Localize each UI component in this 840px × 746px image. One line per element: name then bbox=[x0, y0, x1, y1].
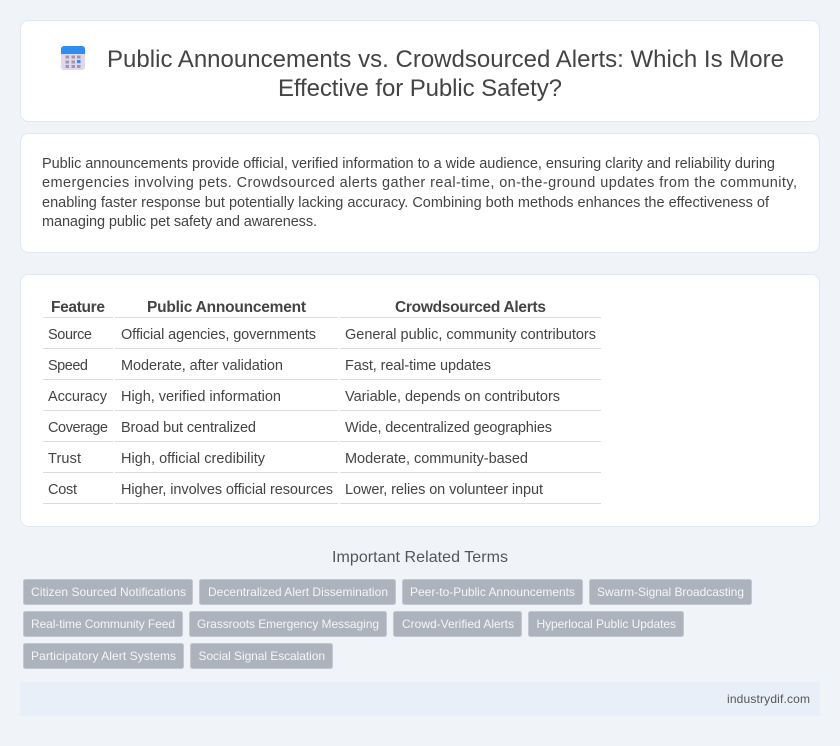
row: cost: Cost bbox=[48, 482, 77, 498]
heading: related terms: Important Related Terms bbox=[332, 549, 508, 566]
tag: Social Signal Escalation bbox=[198, 649, 325, 663]
row: speed: Moderate, after validation bbox=[121, 358, 283, 374]
panel: comparison table bbox=[20, 274, 820, 526]
row: trust: Trust bbox=[48, 451, 81, 467]
intro paragraph: emergencies involving pets. Crowdsourced alerts gather real-time, on-the-ground updates from the community, bbox=[42, 175, 797, 191]
intro paragraph: enabling faster response but potentially lacking accuracy. Combining both methods enhances the effectiveness of bbox=[42, 195, 770, 211]
row: trust: High, official credibility bbox=[121, 451, 266, 467]
tag: Citizen Sourced Notifications bbox=[31, 585, 186, 599]
tag bbox=[200, 580, 396, 604]
footer bbox=[20, 682, 820, 716]
table header bbox=[51, 299, 546, 316]
row: coverage: Broad but centralized bbox=[121, 420, 256, 436]
panel: title header bbox=[20, 20, 820, 122]
icon: calendar bbox=[61, 46, 85, 70]
row: source bbox=[48, 327, 596, 343]
tag bbox=[24, 612, 182, 636]
footer: industrydif.com bbox=[727, 692, 810, 706]
row: accuracy: High, verified information bbox=[121, 389, 281, 405]
table header: Crowdsourced Alerts bbox=[395, 299, 546, 316]
tag: Crowd-Verified Alerts bbox=[402, 617, 514, 631]
tag bbox=[528, 612, 684, 636]
tag bbox=[190, 612, 386, 636]
tag: Peer-to-Public Announcements bbox=[410, 585, 575, 599]
tag: Swarm-Signal Broadcasting bbox=[597, 585, 744, 599]
tag bbox=[190, 644, 332, 668]
tag list bbox=[24, 580, 752, 668]
row: cost: Lower, relies on volunteer input bbox=[345, 482, 543, 498]
intro paragraph bbox=[42, 156, 797, 230]
row: cost bbox=[48, 482, 543, 498]
table header: Feature bbox=[51, 299, 105, 316]
row: accuracy: Variable, depends on contributors bbox=[345, 389, 560, 405]
row: cost: Higher, involves official resources bbox=[121, 482, 333, 498]
tag: Participatory Alert Systems bbox=[31, 649, 176, 663]
row: coverage: Wide, decentralized geographies bbox=[345, 420, 552, 436]
intro paragraph: managing public pet safety and awareness. bbox=[42, 214, 317, 230]
intro paragraph: Public announcements provide official, verified information to a wide audience, ensuring clarity and reliability during bbox=[42, 156, 775, 172]
row: source: Official agencies, governments bbox=[121, 327, 316, 343]
row: trust bbox=[48, 451, 528, 467]
title: Effective for Public Safety? bbox=[278, 75, 562, 102]
title bbox=[107, 46, 784, 102]
row: source: General public, community contributors bbox=[345, 327, 596, 343]
tag bbox=[394, 612, 522, 636]
panel: intro text bbox=[20, 134, 820, 252]
row: speed: Fast, real-time updates bbox=[345, 358, 491, 374]
row: accuracy: Accuracy bbox=[48, 389, 108, 405]
row: accuracy bbox=[48, 389, 560, 405]
row: speed bbox=[48, 358, 491, 374]
tag bbox=[24, 580, 192, 604]
row: coverage: Coverage bbox=[48, 420, 108, 436]
tag: Hyperlocal Public Updates bbox=[536, 617, 676, 631]
tag: Grassroots Emergency Messaging bbox=[197, 617, 379, 631]
tag: Decentralized Alert Dissemination bbox=[208, 585, 388, 599]
table header: Public Announcement bbox=[147, 299, 306, 316]
row: speed: Speed bbox=[48, 358, 88, 374]
tag bbox=[402, 580, 582, 604]
title: Public Announcements vs. Crowdsourced Alerts: Which Is More bbox=[107, 46, 784, 73]
row: source: Source bbox=[48, 327, 92, 343]
tag: Real-time Community Feed bbox=[31, 617, 175, 631]
tag bbox=[590, 580, 752, 604]
row: coverage bbox=[48, 420, 552, 436]
tag bbox=[24, 644, 184, 668]
row: trust: Moderate, community-based bbox=[345, 451, 528, 467]
